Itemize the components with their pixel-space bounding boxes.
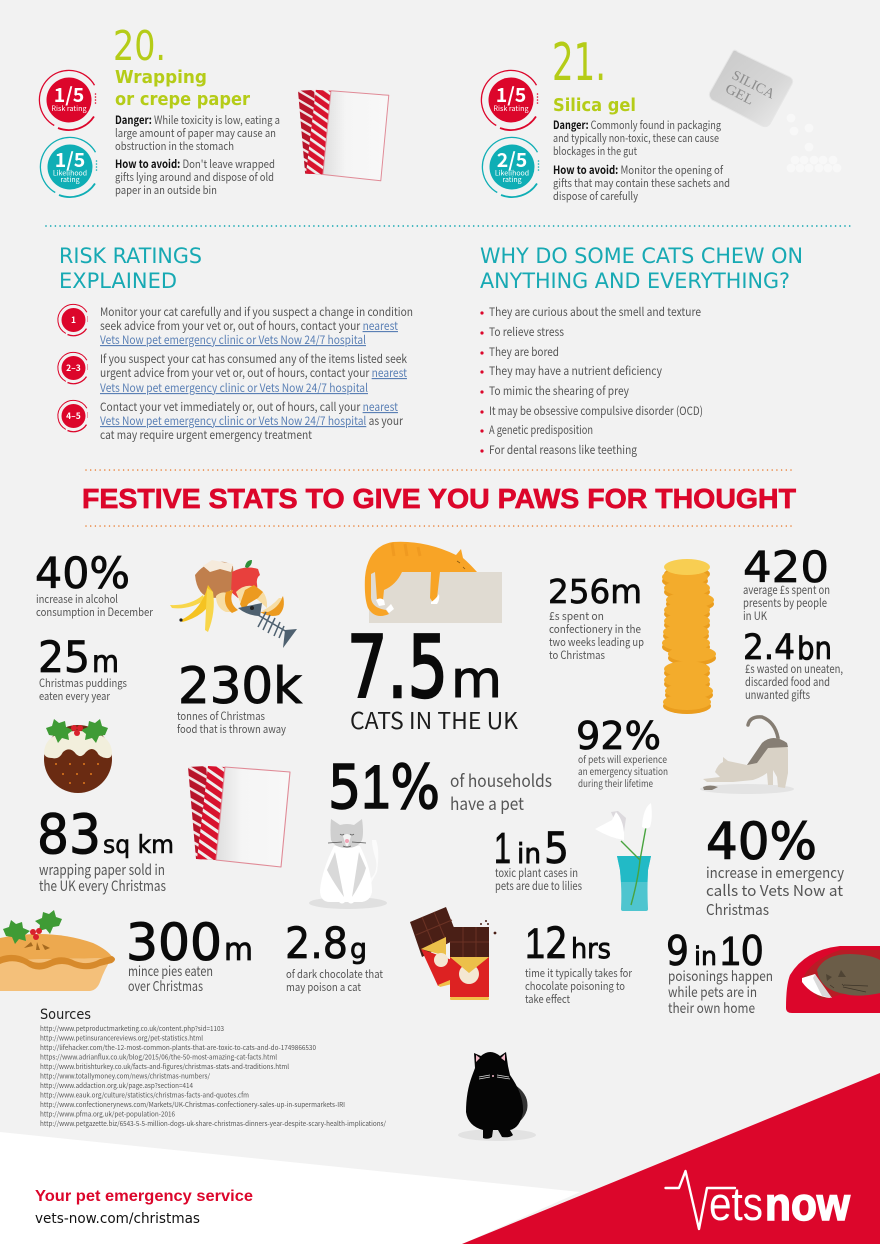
stat: 25m puddings: eaten every year [39, 688, 111, 704]
list of source urls [40, 1023, 386, 1128]
white footer band [0, 1132, 580, 1244]
stat: 300m mince pies: m [224, 932, 253, 968]
stat: 51% households with pets: have a pet [450, 790, 525, 815]
danger text [115, 112, 280, 154]
stat: 51% households with pets [328, 752, 552, 823]
heading: why do some cats chew: WHY DO SOME CATS CHEW ON [480, 244, 803, 268]
bullet list of reasons: To relieve stress [489, 324, 564, 340]
stat: 420 presents: presents by people [743, 595, 827, 611]
stat: 7.5m cats in the UK: 7.5 [347, 618, 448, 718]
danger text: obstruction in the stomach [115, 138, 234, 154]
stat: 256m confectionery: £s spent on [549, 608, 604, 624]
risk rating badge 1/5 [481, 70, 538, 130]
stat: 25m puddings: m [92, 645, 119, 680]
stat: 40% alcohol: increase in alcohol [36, 591, 118, 607]
list of source urls: http://www.totallymoney.com/news/christmas-numbers/ [40, 1070, 210, 1080]
list of source urls: http://www.eauk.org/culture/statistics/christmas-facts-and-quotes.cfm [40, 1090, 249, 1100]
stat: 40% emergency calls: 40% [706, 813, 817, 872]
stat: 1 in 5 lilies [494, 824, 582, 894]
likelihood rating badge 2/5: Likelihood [495, 168, 529, 178]
text: rating 2-3 advice: urgent advice from your vet or, out of hours, contact your nearest [100, 365, 408, 381]
icon: chocolate bars [410, 907, 496, 1000]
text: rating 2-3 advice: Vets Now pet emergency clinic or Vets Now 24/7 hospital [100, 380, 368, 396]
icon: coin stack [662, 559, 716, 714]
list of source urls: http://www.addaction.org.uk/page.asp?section=414 [40, 1080, 193, 1090]
stat: 1 in 5 lilies: toxic plant cases in [495, 865, 578, 881]
heading: why do some cats chew: ANYTHING AND EVERYTHING? [480, 269, 790, 293]
stat: 1 in 5 lilies: 1 [494, 824, 511, 873]
danger text: and typically non-toxic, these can cause [553, 130, 719, 146]
icon: silica gel sachet: SILICA [729, 68, 778, 103]
stat: 25m puddings: 25 [38, 633, 90, 683]
danger text: large amount of paper may cause an [115, 125, 276, 141]
bullet list of reasons: They may have a nutrient deficiency [489, 363, 662, 379]
stat: 12hrs poisoning time: chocolate poisoning to [525, 978, 625, 994]
bullet list of reasons [480, 304, 703, 458]
stat: 40% emergency calls: Christmas [706, 899, 769, 920]
icon: food waste pile [170, 560, 297, 648]
stat: 12hrs poisoning time [525, 919, 633, 1007]
list of source urls: http://www.confectionerynews.com/Markets/UK-Christmas-confectionery-sales-up-in-supermarkets-IRI [40, 1099, 345, 1109]
stat: 9 in 10 poisonings: poisonings happen [668, 966, 773, 986]
text: rating 1 advice [100, 304, 413, 348]
badge: rating 1: 1 [71, 314, 76, 326]
stat: 40% alcohol: 40% [35, 549, 130, 599]
footer: tagline: Your pet emergency service [35, 1188, 253, 1205]
logo: Vets Now: now [765, 1178, 850, 1230]
list of source urls: https://www.adrianflux.co.uk/blog/2015/06/the-50-most-amazing-cat-facts.html [40, 1052, 277, 1062]
list of source urls: http://www.britishturkey.co.uk/facts-and-figures/christmas-stats-and-traditions.html [40, 1061, 289, 1071]
how to avoid text: paper in an outside bin [115, 182, 217, 198]
stat: 12hrs poisoning time: hrs [571, 932, 611, 965]
icon: mince pie [0, 910, 115, 991]
stat: 300m mince pies [126, 914, 253, 995]
how to avoid text: How to avoid: Monitor the opening of [553, 162, 723, 178]
danger text: Danger: Commonly found in packaging [553, 117, 722, 133]
stat: 83 sq km wrapping paper: sq km [103, 830, 174, 859]
list of source urls: http://www.petgazette.biz/6543-5-5-million-dogs-uk-share-christmas-dinners-year-despite-scary-health-implications/ [40, 1118, 386, 1128]
danger text [553, 117, 722, 159]
text: rating 1 advice: Vets Now pet emergency clinic or Vets Now 24/7 hospital [100, 332, 366, 348]
stat: 12hrs poisoning time: time it typically takes for [525, 965, 633, 981]
bullet list of reasons: They are curious about the smell and texture [489, 304, 701, 320]
badge: rating 4-5: 4–5 [66, 410, 81, 422]
likelihood rating badge 1/5: 1/5 [55, 144, 85, 173]
stat: 51% households with pets: of households [450, 767, 552, 792]
text: rating 4-5 advice [100, 399, 403, 443]
bullet list of reasons: They are bored [489, 344, 559, 360]
badge: rating 4-5 [58, 400, 88, 432]
heading: why do some cats chew [480, 244, 803, 293]
stat: 9 in 10 poisonings: in [694, 942, 717, 972]
icon: sleeping orange cat on box [365, 542, 502, 623]
risk rating badge 1/5: 1/5 [54, 79, 84, 108]
icon: silica beads [787, 114, 841, 172]
how to avoid text: dispose of carefully [553, 188, 638, 204]
stat: 2.8g chocolate [285, 919, 384, 995]
stat: 1 in 5 lilies: 5 [544, 824, 569, 874]
item number 21: 21. [552, 33, 606, 93]
stat: 12hrs poisoning time: take effect [525, 991, 571, 1007]
risk rating badge 1/5: 1/5 [496, 79, 526, 108]
logo: Vets Now [666, 1171, 850, 1230]
stat: 2.4bn wasted: unwanted gifts [745, 687, 810, 703]
likelihood rating badge 2/5: rating [502, 175, 522, 185]
how to avoid text [115, 156, 275, 198]
text: rating 4-5 advice: Vets Now pet emergency clinic or Vets Now 24/7 hospital as your [100, 413, 403, 429]
stat: 420 presents [743, 543, 830, 624]
how to avoid text [553, 162, 730, 204]
risk rating badge 1/5 [39, 70, 96, 130]
heading: wrapping or crepe paper: or crepe paper [115, 89, 250, 110]
stat: 7.5m cats in the UK: m [451, 651, 502, 710]
text: rating 4-5 advice: Contact your vet immediately or, out of hours, call your nearest [100, 399, 399, 415]
stat: 92% emergency: during their lifetime [578, 776, 653, 790]
stat: 9 in 10 poisonings: 10 [720, 927, 764, 975]
stat: 420 presents: in UK [743, 608, 768, 624]
stat: 9 in 10 poisonings: 9 [666, 927, 689, 975]
heading: risk ratings explained: EXPLAINED [59, 269, 177, 293]
item number 20: 20. [113, 22, 166, 70]
stat: 25m puddings: Christmas puddings [39, 675, 127, 691]
stat: 230k food thrown away: food that is thrown away [177, 721, 286, 737]
list of source urls: http://www.petinsurancereviews.org/pet-statistics.html [40, 1032, 203, 1042]
icon: stretching cat [700, 717, 794, 794]
heading: sources: Sources [40, 1007, 91, 1023]
stat: 83 sq km wrapping paper [37, 803, 174, 896]
heading: wrapping or crepe paper [115, 67, 250, 110]
stat: 230k food thrown away: 230k [178, 657, 302, 715]
panel: item 21 silica gel [481, 33, 841, 204]
stat: 40% alcohol: consumption in December [36, 604, 154, 620]
stat: 1 in 5 lilies: pets are due to lilies [495, 878, 582, 894]
stat: 2.8g chocolate: may poison a cat [286, 979, 362, 995]
stat: 83 sq km wrapping paper: the UK every Christmas [39, 875, 166, 896]
stat: 83 sq km wrapping paper: 83 [37, 803, 101, 866]
stat: 40% emergency calls: increase in emergency [706, 862, 844, 883]
stat: 40% emergency calls [706, 813, 844, 920]
stat: 300m mince pies: over Christmas [128, 975, 203, 995]
stat: 2.8g chocolate: 2.8 [285, 919, 348, 969]
stat: 51% households with pets: 51% [328, 752, 440, 823]
panel: item 20 wrapping or crepe paper [39, 22, 389, 198]
stat: 256m confectionery: two weeks leading up [549, 634, 644, 650]
stat: 83 sq km wrapping paper: wrapping paper sold in [39, 859, 165, 880]
stat: 2.4bn wasted: bn [797, 631, 832, 667]
danger text: Danger: While toxicity is low, eating a [115, 112, 280, 128]
stat: 2.4bn wasted: 2.4 [743, 628, 795, 668]
icon: cat in red bed [786, 946, 880, 1013]
text: rating 1 advice: seek advice from your vet or, out of hours, contact your nearest [100, 318, 399, 334]
stat: 92% emergency: of pets will experience [578, 752, 668, 766]
logo: Vets Now: ets [709, 1177, 763, 1230]
stat: 9 in 10 poisonings: while pets are in [668, 982, 757, 1002]
heading: silica gel: Silica gel [553, 95, 636, 116]
stat: 2.8g chocolate: of dark chocolate that [286, 966, 384, 982]
icon: wrapping paper [298, 90, 389, 181]
title: festive stats: FESTIVE STATS TO GIVE YOU PAWS FOR THOUGHT [82, 483, 796, 514]
list of source urls: http://www.pfma.org.uk/pet-population-2016 [40, 1108, 175, 1118]
stat: 420 presents: average £s spent on [743, 582, 830, 598]
stat: 300m mince pies: 300 [126, 914, 222, 973]
stat: 230k food thrown away: tonnes of Christmas [177, 708, 265, 724]
heading: risk ratings explained: RISK RATINGS [59, 244, 202, 268]
stat: 40% alcohol [35, 549, 154, 620]
stat: 7.5m cats in the UK: CATS IN THE UK [350, 702, 518, 736]
red footer triangle [462, 1073, 880, 1244]
stat: 420 presents: 420 [743, 543, 829, 593]
panel: sources [40, 1007, 386, 1128]
stat: 256m confectionery: to Christmas [549, 647, 605, 663]
stat: 2.4bn wasted: discarded food and [745, 674, 830, 690]
danger text: blockages in the gut [553, 143, 638, 159]
bullet list of reasons: To mimic the shearing of prey [489, 383, 629, 399]
list of source urls: http://www.petproductmarketing.co.uk/content.php?sid=1103 [40, 1023, 224, 1033]
how to avoid text: gifts lying around and dispose of old [115, 169, 274, 185]
heading: risk ratings explained [59, 244, 202, 293]
stat: 2.8g chocolate: g [350, 932, 367, 965]
stat: 12hrs poisoning time: 12 [525, 919, 568, 969]
stat: 2.4bn wasted: £s wasted on uneaten, [745, 661, 843, 677]
stat: 40% emergency calls: calls to Vets Now at [706, 880, 843, 901]
stat: 9 in 10 poisonings [666, 927, 773, 1018]
risk rating badge 1/5: Risk rating [51, 104, 87, 114]
text: rating 2-3 advice [100, 351, 408, 396]
icon: lilies in teal vase [595, 803, 652, 911]
stat: 25m puddings [38, 633, 127, 704]
list of source urls: http://lifehacker.com/the-12-most-common-plants-that-are-toxic-to-cats-and-do-1749866530 [40, 1042, 316, 1052]
stat: 256m confectionery [548, 572, 644, 663]
stat: 1 in 5 lilies: in [517, 837, 541, 870]
panel: why do some cats chew [480, 244, 803, 458]
bullet list of reasons: For dental reasons like teething [489, 442, 637, 458]
icon: white cat sitting [309, 819, 387, 909]
stat: 7.5m cats in the UK [347, 618, 518, 736]
stat: 92% emergency: 92% [576, 714, 661, 758]
likelihood rating badge 1/5 [40, 137, 96, 197]
badge: rating 1 [58, 304, 88, 336]
risk rating badge 1/5: Risk rating [493, 104, 529, 114]
stat: 256m confectionery: 256m [548, 572, 642, 611]
icon: wrapping paper [188, 766, 290, 867]
text: rating 1 advice: Monitor your cat carefully and if you suspect a change in condition [100, 304, 413, 320]
how to avoid text: How to avoid: Don't leave wrapped [115, 156, 275, 172]
bullet list of reasons: It may be obsessive compulsive disorder (OCD) [489, 403, 703, 419]
likelihood rating badge 2/5: 2/5 [497, 144, 527, 173]
stat: 2.4bn wasted [743, 628, 843, 703]
stat: 256m confectionery: confectionery in the [549, 621, 641, 637]
stat: 300m mince pies: mince pies eaten [128, 960, 213, 980]
icon: silica gel sachet: GEL [722, 82, 756, 109]
panel: risk ratings explained [58, 244, 413, 443]
badge: rating 2-3: 2–3 [66, 362, 81, 374]
how to avoid text: gifts that may contain these sachets and [553, 175, 730, 191]
bullet list of reasons: A genetic predisposition [489, 422, 593, 438]
stat: 92% emergency: an emergency situation [578, 764, 668, 778]
stat: 9 in 10 poisonings: their own home [668, 998, 755, 1018]
badge: rating 2-3 [58, 352, 88, 384]
text: rating 4-5 advice: cat may require urgent emergency treatment [100, 427, 313, 443]
likelihood rating badge 2/5 [482, 137, 538, 197]
icon: black cat [458, 1052, 536, 1141]
stat: 92% emergency [576, 714, 668, 790]
heading: wrapping or crepe paper: Wrapping [115, 67, 207, 88]
likelihood rating badge 1/5: Likelihood [53, 168, 87, 178]
icon: christmas pudding [44, 719, 112, 793]
icon: silica gel sachet [709, 50, 793, 127]
likelihood rating badge 1/5: rating [60, 175, 80, 185]
footer: website url: vets-now.com/christmas [35, 1211, 200, 1227]
text: rating 2-3 advice: If you suspect your cat has consumed any of the items listed seek [100, 351, 408, 367]
